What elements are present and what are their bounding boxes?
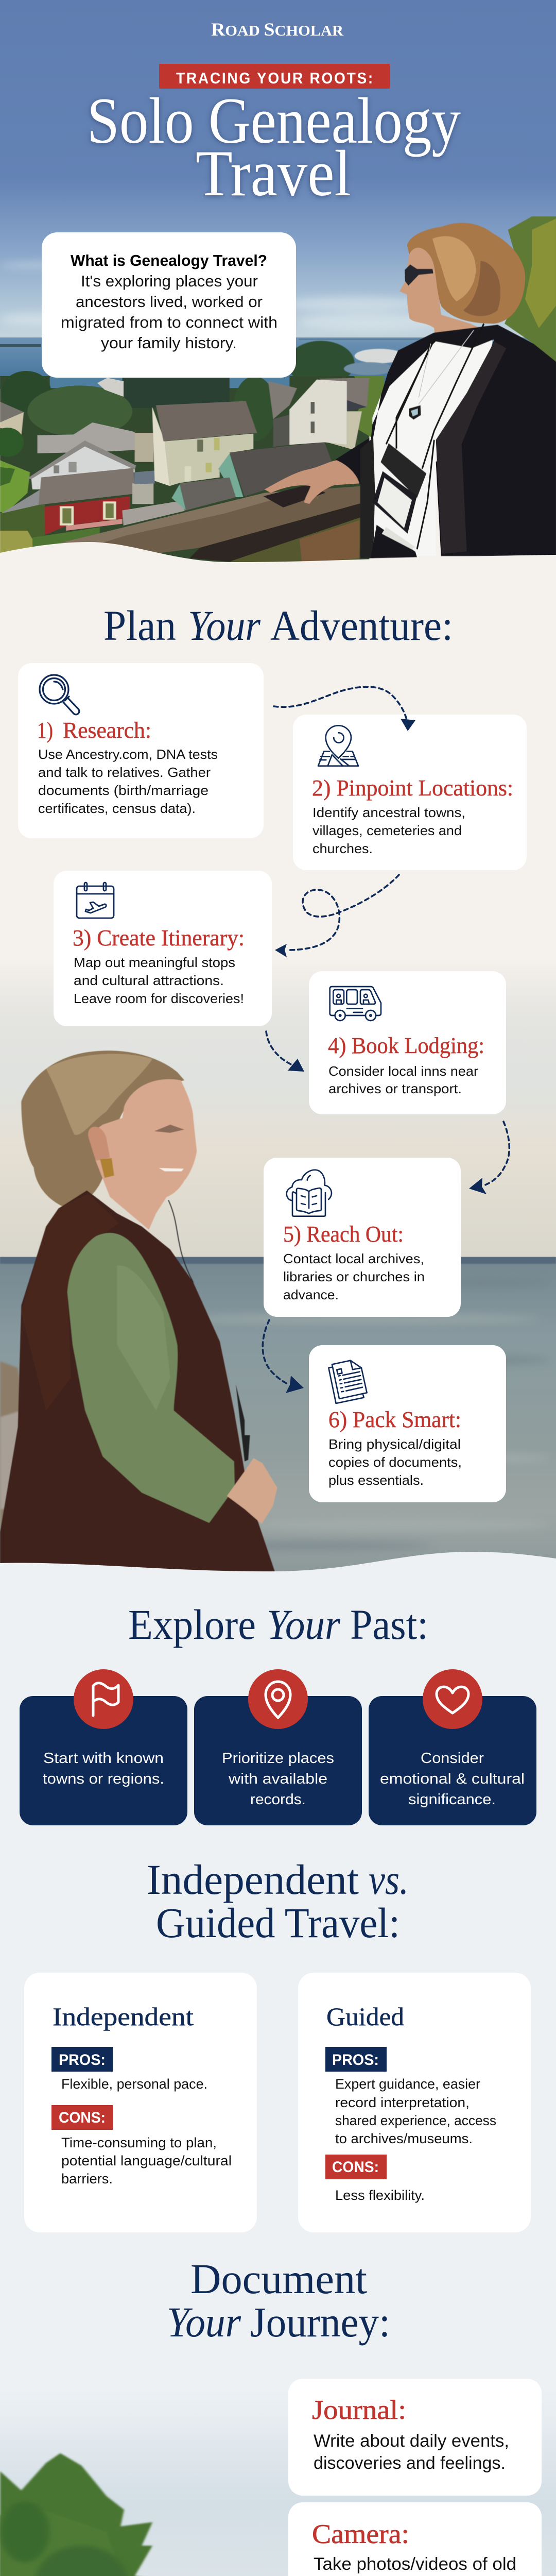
heading: research: 1) [37,718,53,743]
figure in scene coordinates [0,1050,277,1571]
panel: step 3 create itinerary [54,871,272,1026]
panel: step 6 pack smart [309,1345,506,1502]
text: guided pros [335,2076,496,2146]
text: prioritize places: Prioritize places [222,1750,334,1767]
icon: magnifying glass [40,675,79,715]
heading: explore your past [128,1601,428,1648]
text: guided pros: record interpretation, [335,2095,470,2110]
panel: start with known towns [20,1669,187,1825]
heading: independent vs guided travel: Independent [147,1856,359,1903]
heading: explore your past: Past: [350,1601,428,1648]
heading: plan your adventure: Plan [103,602,176,649]
text: reach out: Contact local archives, [283,1251,424,1266]
panel: prioritize places [194,1669,362,1825]
text: reach out: advance. [283,1287,339,1302]
text: pinpoint locations: Identify ancestral towns, [312,805,465,820]
icon: documents [328,1361,367,1403]
text: camera: Take photos/videos of old [314,2554,516,2574]
label: pros [51,2047,113,2072]
heading: create itinerary: 3) Create Itinerary: [73,925,245,951]
icon: heart [423,1669,482,1729]
heading: document your journey: Document [190,2255,367,2302]
title: Solo Genealogy [87,85,461,157]
heading: pinpoint locations: 2) Pinpoint Locations: [312,775,513,801]
panel: step 4 book lodging [309,971,506,1114]
heading: book lodging: 4) Book Lodging: [328,1033,484,1058]
arrow: step 4 to step 5 [469,1122,509,1194]
panel: step 5 reach out [264,1158,461,1317]
icon: flag [74,1669,133,1729]
heading: independent vs guided travel: Guided Travel: [156,1899,400,1946]
icon: calendar with plane [77,883,114,918]
icon: map pin on map [318,725,358,766]
text: guided pros: shared experience, access [335,2113,496,2128]
heading: plan your adventure [103,602,453,649]
arrow: step 5 to step 6 [263,1320,304,1393]
text: journal [314,2431,509,2473]
panel: journal [288,2379,542,2496]
arrow: step 3 to step 4 [266,1031,304,1072]
heading: independent vs guided travel: vs. [369,1856,409,1903]
heading: independent vs guided travel [147,1856,409,1946]
label: cons: CONS: [332,2159,379,2176]
text: pack smart: copies of documents, [328,1454,462,1470]
label: cons [325,2155,387,2179]
heading: document your journey: Your [167,2298,241,2346]
text: consider significance: significance. [408,1791,496,1808]
callout: what is genealogy travel: migrated from to connect with [61,313,277,331]
text: prioritize places: records. [250,1791,306,1808]
arrow: step 1 to step 2 [274,687,415,731]
text: start with known towns [43,1750,164,1787]
label: pros [325,2047,387,2072]
text: consider significance: Consider [421,1750,484,1767]
distant town and trees [287,341,404,386]
text: start with known towns: towns or regions. [43,1771,164,1787]
label: cons: CONS: [59,2109,106,2126]
text: independent cons: potential language/cultural [61,2153,232,2168]
panel: consider significance [369,1669,536,1825]
text: create itinerary: and cultural attractions. [74,973,224,988]
text: independent cons: barriers. [61,2171,113,2187]
panel: camera [288,2502,542,2576]
village in close-up coordinates [0,371,384,567]
heading: pack smart: 6) Pack Smart: [328,1407,461,1432]
callout: what is genealogy travel: It's exploring places your [81,272,258,290]
text: journal: Write about daily events, [314,2431,509,2451]
title: Travel [196,138,351,210]
heading: document your journey: Journey: [250,2298,390,2346]
photo: woman by the sea [0,958,556,1577]
text: pack smart: plus essentials. [328,1472,424,1488]
pale wave transition [0,1552,556,1577]
callout: what is genealogy travel: your family history. [101,334,237,352]
text: pinpoint locations [312,805,465,856]
panel: independent travel [24,1973,257,2232]
text: consider significance [380,1750,525,1808]
text: book lodging: Consider local inns near [328,1063,478,1079]
heading: document your journey [167,2255,390,2346]
callout: what is genealogy travel [42,232,296,378]
icon: cloud with open book [287,1170,332,1216]
text: create itinerary: Map out meaningful stops [74,955,235,970]
text: guided pros: to archives/museums. [335,2131,473,2146]
icon: shuttle bus [330,987,381,1021]
text: reach out [283,1251,425,1302]
cream wave transition [0,542,556,572]
heading: camera: Camera: [312,2519,409,2549]
text: pack smart [328,1436,462,1488]
text: reach out: libraries or churches in [283,1269,425,1284]
callout: what is genealogy travel: ancestors lived, worked or [76,293,263,311]
panel: step 2 pinpoint locations [293,715,527,870]
label: pros: PROS: [59,2052,106,2069]
heading: research: Research: [63,718,151,743]
text: pack smart: Bring physical/digital [328,1436,461,1452]
title banner [159,64,390,89]
heading: journal: Journal: [312,2395,406,2425]
label: cons [51,2105,113,2130]
panel: step 1 research [18,663,264,838]
heading: reach out: 5) Reach Out: [283,1222,404,1247]
callout: what is genealogy travel: What is Genealogy Travel? [71,251,267,269]
text: research: and talk to relatives. Gather [38,765,211,780]
logo: ROAD SCHOLAR [211,19,344,40]
text: research: Use Ancestry.com, DNA tests [38,747,218,762]
text: create itinerary [74,955,244,1006]
text: guided pros: Expert guidance, easier [335,2076,480,2092]
text: book lodging: archives or transport. [328,1081,462,1096]
text: pinpoint locations: churches. [312,841,373,856]
woman in close-up coordinates [360,216,556,558]
photo: woman overlooking the harbour village [0,0,556,567]
text: research: documents (birth/marriage [38,783,208,798]
heading: explore your past: Explore [128,1601,256,1648]
text: journal: discoveries and feelings. [314,2453,506,2473]
label: pros: PROS: [332,2052,379,2069]
title banner: TRACING YOUR ROOTS: [176,69,374,87]
text: prioritize places [222,1750,334,1808]
text: independent cons: Time-consuming to plan, [61,2135,217,2150]
text: prioritize places: with available [228,1771,327,1787]
heading: explore your past: Your [267,1601,341,1648]
title [87,85,461,210]
text: research: certificates, census data). [38,801,196,816]
photo: woman walking by a fence above the lake [0,2391,556,2576]
text: independent pros: Flexible, personal pace. [61,2076,207,2092]
text: start with known towns: Start with known [43,1750,164,1767]
heading: plan your adventure: Your [188,602,261,649]
text: guided cons: Less flexibility. [335,2188,425,2203]
heading: guided: Guided [326,2002,404,2031]
text: research [38,747,218,816]
section background: explore and compare [0,1575,556,2400]
text: consider significance: emotional & cultural [380,1771,525,1787]
icon: location pin [248,1669,308,1729]
foliage behind the woman [505,216,556,362]
text: independent cons [61,2135,232,2187]
panel: guided travel [298,1973,531,2232]
heading: plan your adventure: Adventure: [270,602,453,649]
text: book lodging [328,1063,478,1096]
heading: independent: Independent [53,2002,194,2031]
text: pinpoint locations: villages, cemeteries and [312,823,462,838]
arrow: step 2 to step 3 with loop [275,875,399,957]
text: create itinerary: Leave room for discoveries! [74,991,244,1006]
